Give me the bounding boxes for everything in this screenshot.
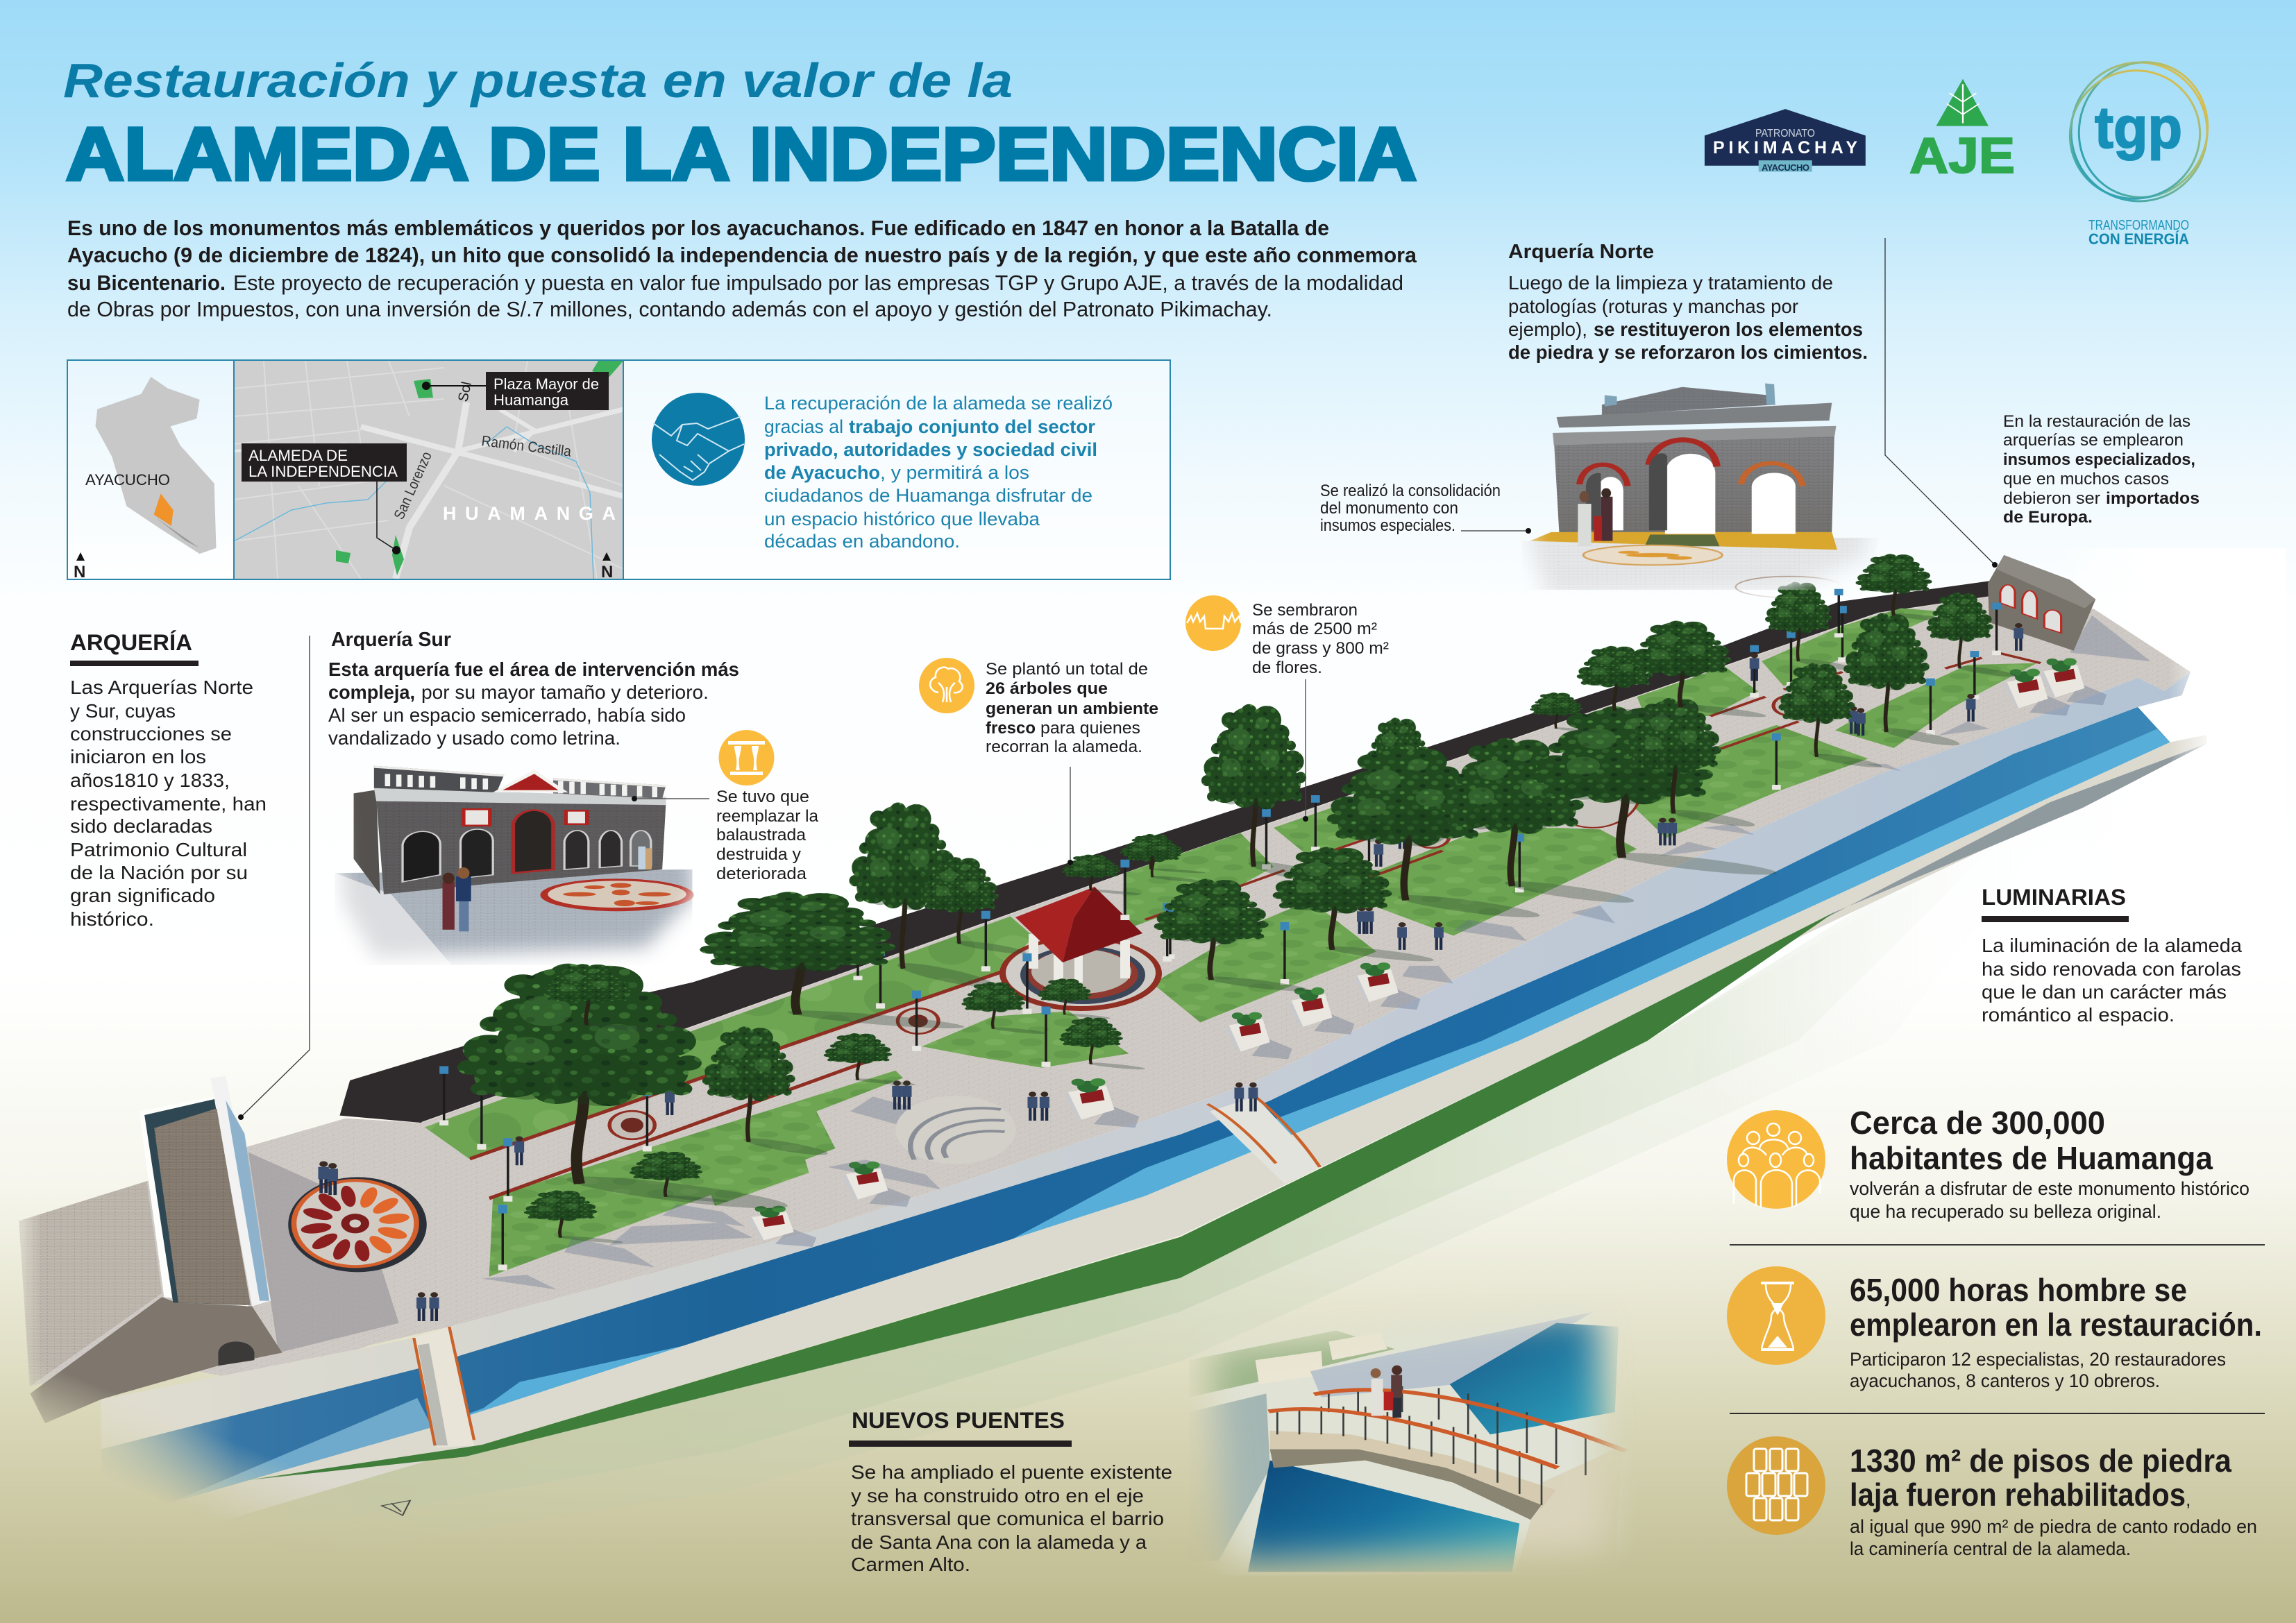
callout: ARQUERÍA — [70, 630, 267, 930]
stat: stone floors: laja fueron rehabilitados — [1850, 1477, 2186, 1513]
callout: NUEVOS PUENTES: NUEVOS PUENTES — [852, 1408, 1065, 1433]
callout: special materials: que en muchos casos — [2003, 470, 2169, 488]
callout: ARQUERÍA: construcciones se — [70, 723, 232, 745]
label: Plaza Mayor: Huamanga — [493, 391, 569, 409]
icon: grass — [1185, 595, 1241, 651]
bridge: crossing south — [414, 1327, 474, 1447]
callout: ARQUERÍA: y Sur, cuyas — [70, 700, 176, 722]
intro paragraph: su Bicentenario. — [67, 271, 226, 295]
callout: Arquería Sur: Al ser un espacio semicerrado, había sido — [328, 704, 686, 726]
title: alameda de la independencia: ALAMEDA DE LA INDEPENDENCIA — [66, 112, 1417, 196]
callout: Arquería Sur: vandalizado y usado como letrina. — [328, 727, 621, 749]
callout: consolidation: insumos especiales. — [1320, 516, 1455, 535]
callout: Arquería Norte: se restituyeron los elementos — [1594, 318, 1863, 340]
callout: Arquería Norte: patologías (roturas y manchas por — [1508, 296, 1798, 317]
callout: NUEVOS PUENTES: Carmen Alto. — [851, 1554, 970, 1575]
far arch: Arquería Norte seen from above — [1988, 555, 2095, 651]
callout: special materials: arquerías se emplearon — [2003, 431, 2184, 450]
text: recovery: gracias al — [764, 416, 843, 437]
illustration: alameda 3D view — [19, 554, 2206, 1555]
panel: location box — [67, 360, 1170, 581]
callout: LUMINARIAS: La iluminación de la alameda — [1982, 935, 2242, 956]
callout: ARQUERÍA: histórico. — [70, 908, 154, 930]
map: Huamanga: San Lorenzo — [391, 450, 435, 522]
icon: handshake — [652, 393, 745, 486]
callout: special materials: de Europa. — [2003, 508, 2093, 527]
text: recovery — [764, 393, 1113, 552]
callout: trees: fresco — [986, 719, 1036, 738]
callout: consolidation — [1320, 482, 1531, 535]
callout: Arquería Sur — [328, 629, 739, 749]
lawns — [425, 609, 2037, 1277]
stat: hours — [1727, 1266, 2262, 1391]
logo: Patronato Pikimachay: PIKIMACHAY — [1713, 138, 1857, 158]
icon: people — [1727, 1110, 1825, 1209]
callout: NUEVOS PUENTES: y se ha construido otro en el eje — [851, 1485, 1144, 1506]
label: Alameda: LA INDEPENDENCIA — [248, 463, 398, 480]
stat: inhabitants: que ha recuperado su belleza original. — [1850, 1201, 2161, 1222]
stat: stone floors: al igual que 990 m² de piedra de canto rodado en — [1850, 1516, 2257, 1537]
label: Plaza Mayor: Plaza Mayor de — [493, 375, 599, 393]
map: Huamanga: Ramón Castilla — [480, 433, 573, 460]
stat: stone floors: la caminería central de la alameda. — [1850, 1538, 2131, 1559]
callout: trees: para quienes — [1040, 719, 1140, 738]
lamps — [439, 589, 2001, 1271]
callout: LUMINARIAS: que le dan un carácter más — [1982, 981, 2227, 1003]
callout: trees: generan un ambiente — [986, 699, 1158, 718]
logo: AJE — [1909, 79, 2015, 184]
callout: grass: de grass y 800 m² — [1252, 639, 1389, 658]
callout: LUMINARIAS: LUMINARIAS — [1982, 885, 2126, 910]
road — [339, 581, 2009, 1123]
planters — [749, 658, 2107, 1247]
callout: trees — [986, 660, 1158, 865]
canal wall — [101, 672, 2191, 1450]
callout: grass — [1252, 601, 1389, 822]
inset: new bridge render — [1189, 1293, 1637, 1576]
text: recovery: décadas en abandono. — [764, 531, 960, 552]
callout: trees: Se plantó un total de — [986, 660, 1148, 679]
stat: inhabitants: habitantes de Huamanga — [1850, 1140, 2213, 1176]
callout: NUEVOS PUENTES: Se ha ampliado el puente existente — [851, 1461, 1172, 1483]
trees — [457, 554, 2018, 1244]
people — [318, 623, 2023, 1321]
callout: trees: recorran la alameda. — [986, 738, 1142, 756]
callout: ARQUERÍA: gran significado — [70, 885, 215, 906]
medallions — [609, 696, 1806, 1164]
leader: Arquería Norte — [1885, 238, 1998, 568]
logo: AJE: AJE — [1909, 128, 2015, 184]
compass marker — [382, 1500, 410, 1515]
map: Huamanga: HUAMANGA — [443, 503, 616, 524]
callout: Arquería Norte: Luego de la limpieza y tratamiento de — [1508, 272, 1833, 294]
stat: hours: ayacuchanos, 8 canteros y 10 obreros. — [1850, 1370, 2160, 1391]
canal lower ledge — [103, 735, 2206, 1552]
callout: Arquería Sur: por su mayor tamaño y deterioro. — [421, 681, 709, 703]
callout: trees: 26 árboles que — [986, 679, 1108, 698]
canal water — [101, 707, 2170, 1522]
callout: LUMINARIAS: ha sido renovada con farolas — [1982, 958, 2241, 980]
map: Peru: AYACUCHO — [85, 471, 170, 488]
icon: paving tiles — [1727, 1436, 1825, 1535]
intro paragraph: Es uno de los monumentos más emblemáticos y queridos por los ayacuchanos. Fue edificado en 1847 en honor a la Batalla de — [67, 216, 1329, 240]
callout: balustrade: destruida y — [716, 845, 801, 864]
stat: inhabitants: volverán a disfrutar de este monumento histórico — [1850, 1178, 2249, 1199]
callout: ARQUERÍA: iniciaron en los — [70, 746, 206, 767]
logo: Patronato Pikimachay — [1705, 109, 1866, 173]
arch: Arquería Sur seen from above — [19, 1076, 282, 1423]
text: recovery: trabajo conjunto del sector — [849, 416, 1096, 437]
callout: special materials — [2003, 412, 2200, 527]
map: Huamanga: N — [601, 563, 613, 581]
callout: balustrade: reemplazar la — [716, 807, 819, 826]
callout: LUMINARIAS: romántico al espacio. — [1982, 1004, 2175, 1026]
map: Huamanga: Sol — [455, 380, 475, 403]
label: Plaza Mayor — [422, 372, 609, 410]
icon: hourglass — [1727, 1266, 1825, 1365]
logo: Patronato Pikimachay: AYACUCHO — [1762, 162, 1809, 173]
text: recovery: de Ayacucho — [764, 462, 880, 483]
map: Peru — [68, 361, 234, 581]
label: Alameda: ALAMEDA DE — [248, 447, 348, 464]
callout: Arquería Sur: Arquería Sur — [331, 629, 451, 651]
logo: TGP: CON ENERGÍA — [2088, 230, 2189, 248]
stat: inhabitants: Cerca de 300,000 — [1850, 1105, 2105, 1141]
stat: stone floors — [1727, 1436, 2257, 1559]
callout: balustrade: deteriorada — [716, 865, 807, 883]
stat: stone floors: , — [2186, 1489, 2191, 1510]
callout: ARQUERÍA: años1810 y 1833, — [70, 770, 230, 791]
callout: special materials: insumos especializados, — [2003, 450, 2195, 469]
intro paragraph — [67, 216, 1417, 321]
callout: NUEVOS PUENTES: de Santa Ana con la alameda y a — [851, 1531, 1147, 1553]
callout: balustrade: Se tuvo que — [716, 788, 809, 806]
stone plaza and walkway — [19, 597, 2191, 1386]
label: Alameda — [242, 443, 407, 554]
callout: Arquería Norte: de piedra y se reforzaron los cimientos. — [1508, 341, 1868, 363]
text: recovery: ciudadanos de Huamanga disfrutar de — [764, 485, 1092, 506]
callout: ARQUERÍA: Las Arquerías Norte — [70, 677, 253, 698]
intro paragraph: Ayacucho (9 de diciembre de 1824), un hito que consolidó la independencia de nuestro país y de la región, y que este año conmemora — [67, 243, 1417, 267]
callout: Arquería Sur: Esta arquería fue el área de intervención más — [328, 658, 739, 680]
map: Peru: N — [74, 563, 85, 581]
stat: hours: emplearon en la restauración. — [1850, 1307, 2262, 1343]
callout: balustrade: balaustrada — [716, 826, 807, 844]
red path borders — [470, 652, 2041, 1198]
walkway shadows — [482, 615, 2151, 1290]
callout: special materials: debieron ser — [2003, 489, 2100, 508]
leader: Arquería Sur — [238, 636, 310, 1120]
title: restauración: Restauración y puesta en valor de la — [63, 53, 1013, 108]
bank fade bands — [331, 896, 1899, 1499]
intro paragraph: Este proyecto de recuperación y puesta en valor fue impulsado por las empresas TGP y Grupo AJE, a través de la modalidad — [233, 271, 1403, 295]
green bank — [249, 912, 1834, 1480]
callout: Arquería Norte: Arquería Norte — [1508, 241, 1654, 263]
callout: Arquería Sur: compleja, — [328, 681, 415, 703]
logo: TGP: tgp — [2095, 95, 2182, 160]
callout: NUEVOS PUENTES — [849, 1408, 1172, 1575]
callout: grass: Se sembraron — [1252, 601, 1358, 620]
callout: LUMINARIAS — [1982, 885, 2242, 1026]
logo: TGP — [2049, 44, 2227, 248]
logo: TGP: TRANSFORMANDO — [2088, 218, 2189, 233]
callout: grass: más de 2500 m² — [1252, 620, 1377, 638]
callout: balustrade — [632, 788, 819, 883]
text: recovery: La recuperación de la alameda se realizó — [764, 393, 1113, 414]
callout: consolidation: Se realizó la consolidación — [1320, 482, 1501, 500]
map: Huamanga — [234, 360, 623, 581]
inset: Arquería Sur render — [335, 766, 694, 965]
callout: grass: de flores. — [1252, 658, 1322, 677]
callout: ARQUERÍA: ARQUERÍA — [70, 630, 192, 655]
stat: stone floors: 1330 m² de pisos de piedra — [1850, 1443, 2231, 1479]
icon: tree — [919, 658, 974, 713]
inset: Arquería Norte render — [1521, 384, 1880, 597]
stat: hours: 65,000 horas hombre se — [1850, 1272, 2187, 1308]
logo: Patronato Pikimachay: PATRONATO — [1755, 128, 1815, 139]
south medallion — [248, 1153, 427, 1352]
callout: NUEVOS PUENTES: transversal que comunica el barrio — [851, 1508, 1164, 1529]
intro paragraph: de Obras por Impuestos, con una inversión de S/.7 millones, contando además con el apoyo y gestión del Patronato Pikimachay. — [67, 297, 1272, 321]
callout: Arquería Norte: ejemplo), — [1508, 318, 1587, 340]
callout: Arquería Norte — [1508, 241, 1868, 363]
stat: inhabitants — [1727, 1105, 2249, 1222]
callout: consolidation: del monumento con — [1320, 499, 1458, 518]
callout: ARQUERÍA: de la Nación por su — [70, 862, 248, 883]
callout: ARQUERÍA: Patrimonio Cultural — [70, 839, 247, 860]
callout: special materials: importados — [2106, 489, 2200, 508]
gazebo — [999, 887, 1162, 1011]
callout: ARQUERÍA: sido declaradas — [70, 815, 212, 837]
bridge: crossing north — [1208, 1096, 1322, 1184]
callout: ARQUERÍA: respectivamente, han — [70, 793, 267, 815]
icon: balustrade — [719, 730, 775, 785]
stat: hours: Participaron 12 especialistas, 20 restauradores — [1850, 1349, 2226, 1370]
callout: special materials: En la restauración de las — [2003, 412, 2191, 431]
text: recovery: privado, autoridades y sociedad civil — [764, 439, 1097, 460]
text: recovery: un espacio histórico que llevaba — [764, 509, 1040, 529]
text: recovery: , y permitirá a los — [880, 462, 1029, 483]
